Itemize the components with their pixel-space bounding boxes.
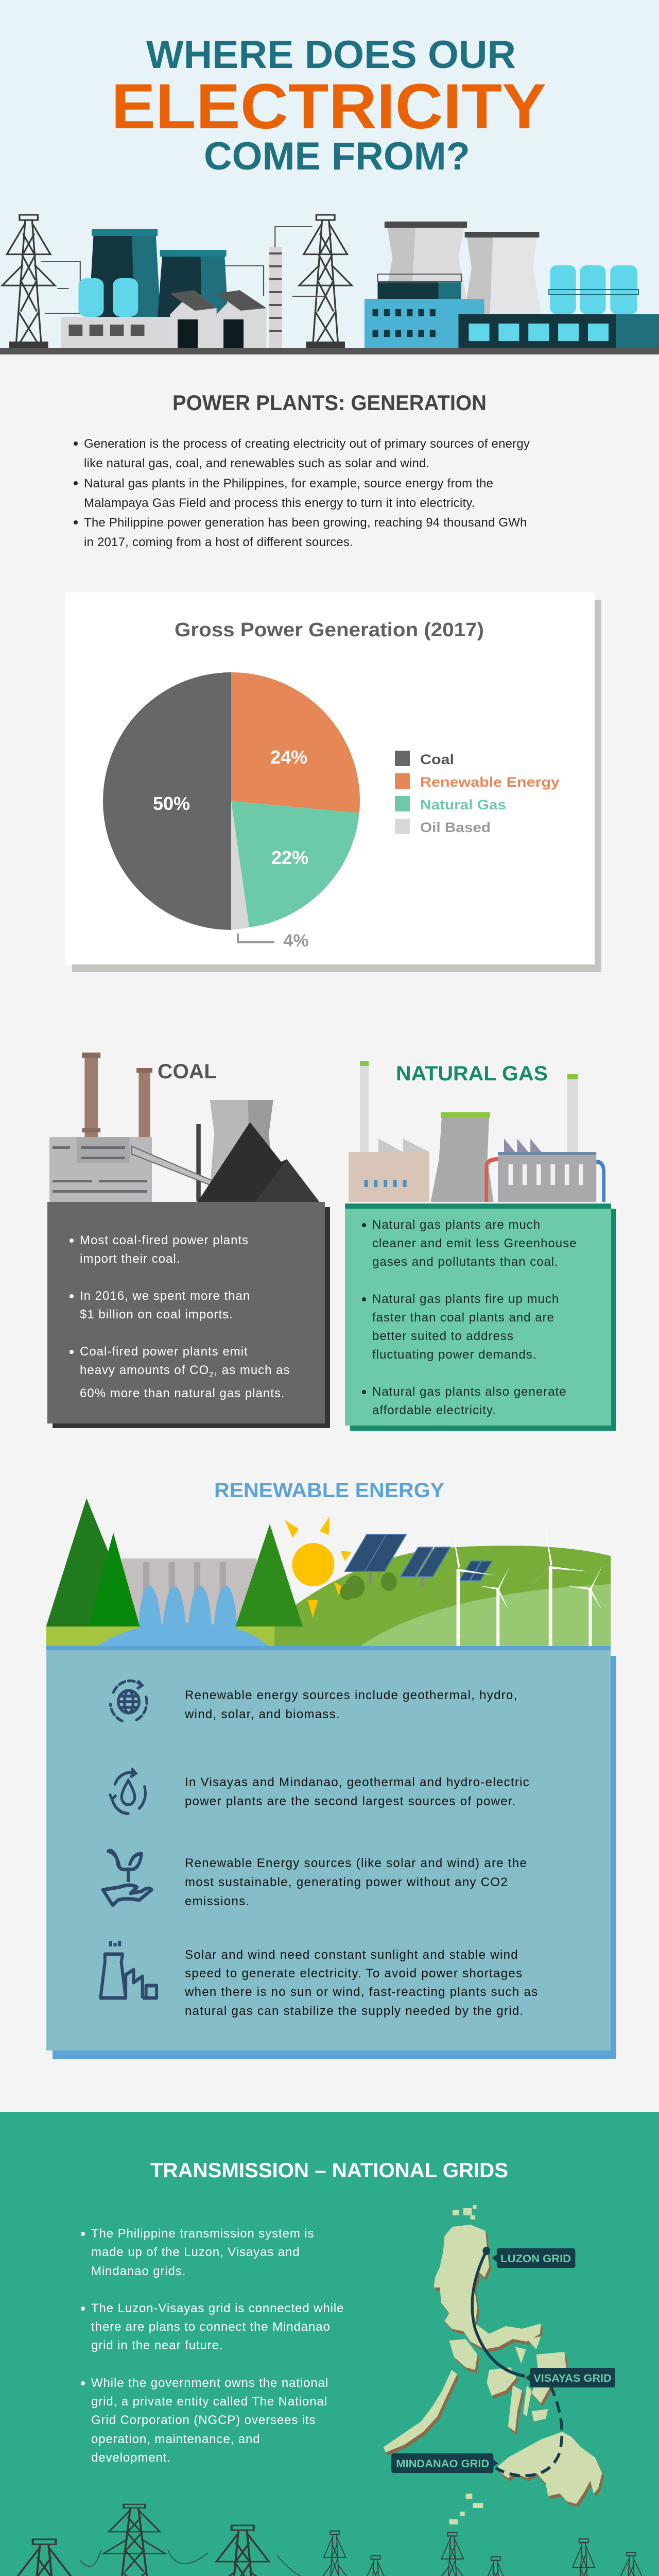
pie chart with title and labels: Coal [420, 752, 454, 767]
coal panel shadow [53, 1207, 330, 1428]
coal bullets: In 2016, we spent more than [80, 1289, 250, 1303]
map: philippines grids [383, 2205, 616, 2524]
natural gas bullets: faster than coal plants and are [372, 1311, 554, 1325]
icon: power plant [99, 1941, 159, 2000]
coal bullets [70, 1233, 290, 1400]
generation bullets: The Philippine power generation has been growing, reaching 94 thousand GWh [84, 516, 527, 530]
title: WHERE DOES OUR [146, 33, 516, 77]
transmission bullets: operation, maintenance, and [91, 2432, 261, 2446]
pie chart with title and labels: Oil Based [420, 820, 491, 835]
text: visayas and mindanao: power plants are the second largest sources of power. [185, 1794, 516, 1808]
header illustration: power plants skyline [0, 214, 659, 354]
text: solar and wind stability: when there is no sun or wind, fast-reacting plants such as [185, 1985, 538, 1999]
coal bullets: $1 billion on coal imports. [80, 1308, 233, 1321]
transmission bullets: grid, a private entity called The National [91, 2395, 327, 2409]
natural gas bullets: Natural gas plants are much [372, 1218, 541, 1232]
renewable panel shadow [53, 1656, 616, 2059]
transmission bullets: Grid Corporation (NGCP) oversees its [91, 2413, 316, 2427]
natural gas illustration [349, 1061, 605, 1202]
generation bullets: in 2017, coming from a host of different sources. [84, 535, 353, 549]
coal bullets: heavy amounts of CO2, as much as [80, 1363, 290, 1379]
header background [0, 0, 659, 355]
transmission bullets: development. [91, 2451, 171, 2465]
pie chart with title and labels: 24% [270, 747, 307, 768]
generation bullets: like natural gas, coal, and renewables such as solar and wind. [84, 456, 429, 470]
map: philippines grids: LUZON GRID [500, 2253, 571, 2265]
title: ELECTRICITY [111, 71, 546, 142]
coal bullets: Coal-fired power plants emit [80, 1345, 248, 1359]
text: solar and wind stability: natural gas can stabilize the supply needed by the grid. [185, 2004, 524, 2018]
text: sustainable sources: emissions. [185, 1894, 250, 1908]
map: philippines grids: VISAYAS GRID [533, 2372, 612, 2384]
pie chart with title and labels: Renewable Energy [420, 774, 560, 790]
natural gas bullets: Natural gas plants also generate [372, 1385, 567, 1399]
title: COME FROM? [204, 134, 470, 178]
panel: gross power generation chart [65, 592, 595, 964]
text: solar and wind stability [185, 1948, 538, 2018]
transmission bullets: made up of the Luzon, Visayas and [91, 2245, 300, 2259]
text: solar and wind stability: Solar and wind need constant sunlight and stable wind [185, 1948, 518, 1962]
generation bullets: Malampaya Gas Field and process this energy to turn it into electricity. [84, 496, 475, 510]
transmission bullets: While the government owns the national [91, 2376, 328, 2390]
transmission bullets: The Philippine transmission system is [91, 2227, 314, 2241]
pie chart with title and labels: Natural Gas [420, 797, 506, 812]
text: renewable sources: Renewable energy sources include geothermal, hydro, [185, 1688, 518, 1702]
coal bullets: import their coal. [80, 1252, 180, 1266]
generation bullets: Natural gas plants in the Philippines, for example, source energy from the [84, 477, 493, 490]
text: visayas and mindanao: In Visayas and Mindanao, geothermal and hydro-electric [185, 1775, 530, 1789]
natural gas bullets [362, 1218, 577, 1417]
heading: natural gas: NATURAL GAS [396, 1062, 548, 1084]
coal bullets: Most coal-fired power plants [80, 1233, 249, 1247]
chart card shadow [72, 600, 601, 972]
pie chart with title and labels [103, 619, 560, 951]
text: solar and wind stability: speed to generate electricity. To avoid power shortages [185, 1967, 523, 1980]
transmission bullets: there are plans to connect the Mindanao [91, 2320, 331, 2334]
panel: transmission section background [0, 2112, 659, 2576]
text: sustainable sources: most sustainable, generating power without any CO2 [185, 1875, 508, 1889]
generation bullets [74, 437, 530, 549]
natural gas bullets: fluctuating power demands. [372, 1348, 537, 1362]
natural gas bullets: Natural gas plants fire up much [372, 1292, 559, 1306]
natural gas bullets: better suited to address [372, 1329, 514, 1343]
pie chart with title and labels: Gross Power Generation (2017) [175, 619, 484, 641]
generation bullets: Generation is the process of creating electricity out of primary sources of energy [84, 437, 530, 451]
pie chart with title and labels: 50% [153, 793, 190, 814]
panel: natural gas [345, 1204, 611, 1426]
coal bullets: 60% more than natural gas plants. [80, 1386, 285, 1400]
text: sustainable sources: Renewable Energy sources (like solar and wind) are the [185, 1856, 527, 1870]
transmission bullets [81, 2227, 344, 2465]
natural gas bullets: gases and pollutants than coal. [372, 1255, 559, 1269]
transmission bullets: grid in the near future. [91, 2338, 223, 2352]
text: renewable sources: wind, solar, and biomass. [185, 1707, 340, 1721]
pie chart with title and labels: 4% [283, 931, 309, 951]
transmission bullets: Mindanao grids. [91, 2264, 186, 2278]
text: sustainable sources [185, 1856, 527, 1908]
transmission bullets: The Luzon-Visayas grid is connected while [91, 2301, 344, 2315]
panel: renewable energy [46, 1650, 611, 2050]
transmission towers and substation [16, 2504, 643, 2576]
natural gas panel shadow [350, 1209, 616, 1431]
panel: coal [47, 1202, 325, 1423]
title [111, 33, 546, 178]
icon: water drop with arrows [109, 1768, 147, 1815]
icon: hand holding plant [101, 1849, 153, 1907]
natural gas bullets: cleaner and emit less Greenhouse [372, 1236, 577, 1250]
map: philippines grids: MINDANAO GRID [396, 2458, 489, 2470]
coal illustration [49, 1053, 319, 1202]
pie chart with title and labels: 22% [271, 847, 308, 868]
icon: globe with recycling arrows [109, 1680, 148, 1722]
natural gas bullets: affordable electricity. [372, 1403, 496, 1417]
renewable illustration: trees, dam, sun, solar panels, wind turbines [46, 1498, 611, 1650]
heading: power plants generation: POWER PLANTS: GENERATION [172, 391, 487, 415]
text: visayas and mindanao [185, 1775, 530, 1808]
text: renewable sources [185, 1688, 518, 1721]
